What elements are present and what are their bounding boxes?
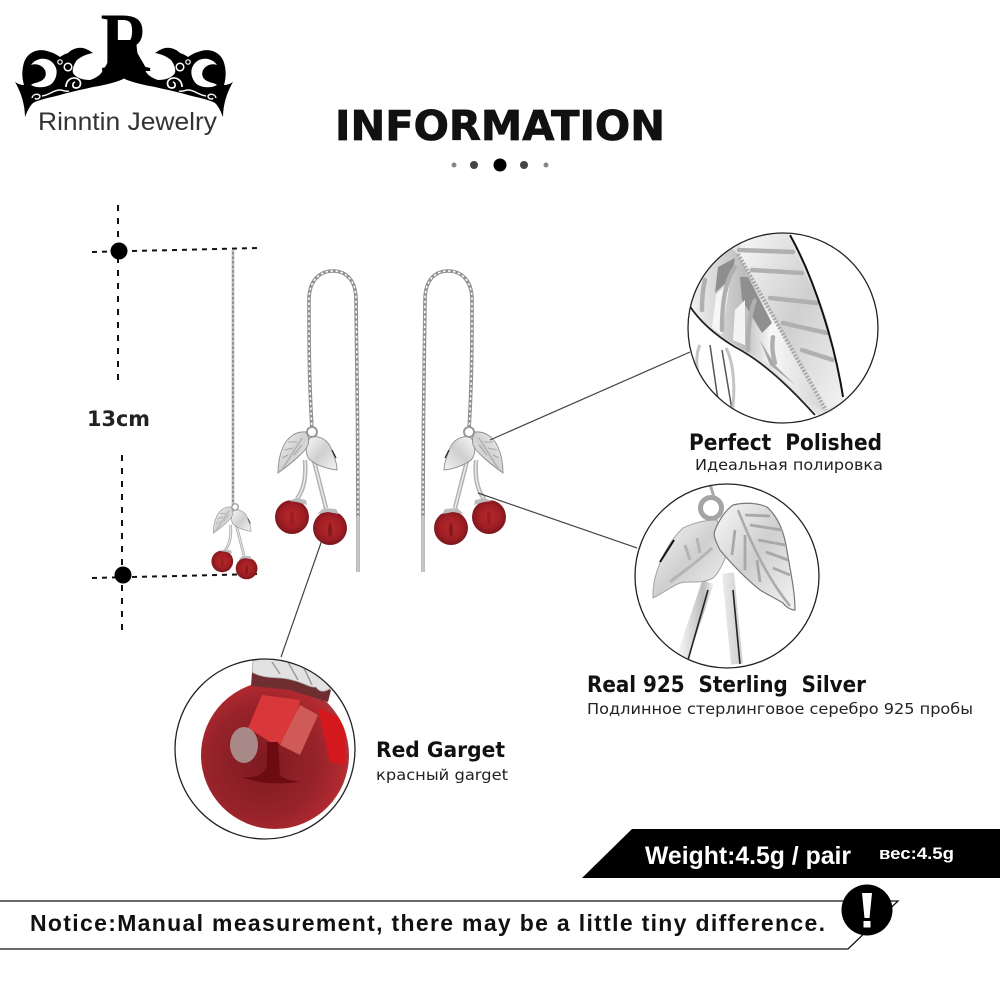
label: Real 925 Sterling Silver: Подлинное стерлинговое серебро 925 пробы [587,700,973,718]
label: Red Garget [376,738,508,784]
silver cap [251,672,331,702]
leader lines [281,352,690,657]
stems [681,573,737,664]
title dots [452,158,548,172]
garnet ball [201,681,349,829]
label: Red Garget: красный garget [376,766,508,784]
detail circle: red garnet [175,657,355,839]
dimension label: 13cm [87,407,150,431]
label: Perfect Polished: Perfect Polished [689,431,882,456]
weight text: Weight:4.5g / pair [645,842,851,870]
earring left [275,271,358,572]
right leaf [714,503,795,610]
left leaf [653,520,727,598]
leaf veins [702,250,833,363]
leaf edges [689,305,815,415]
notice text: Notice:Manual measurement, there may be a little tiny difference. [30,910,825,936]
label: Real 925 Sterling Silver: Real 925 Sterling Silver [587,673,866,698]
detail circle: polished leaf [680,230,878,423]
small earring hanging straight [211,250,257,579]
leaf shape [694,234,842,416]
dimension marker: 13cm [87,205,258,630]
title: INFORMATION [335,102,665,150]
logo: Rinntin Jewelry [15,0,233,136]
jump ring [700,498,722,518]
logo flourish left [15,40,125,117]
logo wordmark: Rinntin Jewelry [38,108,218,136]
label: Real 925 Sterling Silver [587,673,973,718]
label: Red Garget: Red Garget [376,738,505,762]
weight banner [582,829,1000,878]
earring right [423,271,506,572]
weight text russian: вес:4.5g [879,844,954,863]
icon: exclamation [842,884,892,936]
label: Perfect Polished [689,431,883,474]
label: Perfect Polished: Идеальная полировка [695,456,883,474]
notice box [0,884,898,949]
detail circle: silver leaves [635,484,819,668]
logo flourish right [123,40,233,117]
